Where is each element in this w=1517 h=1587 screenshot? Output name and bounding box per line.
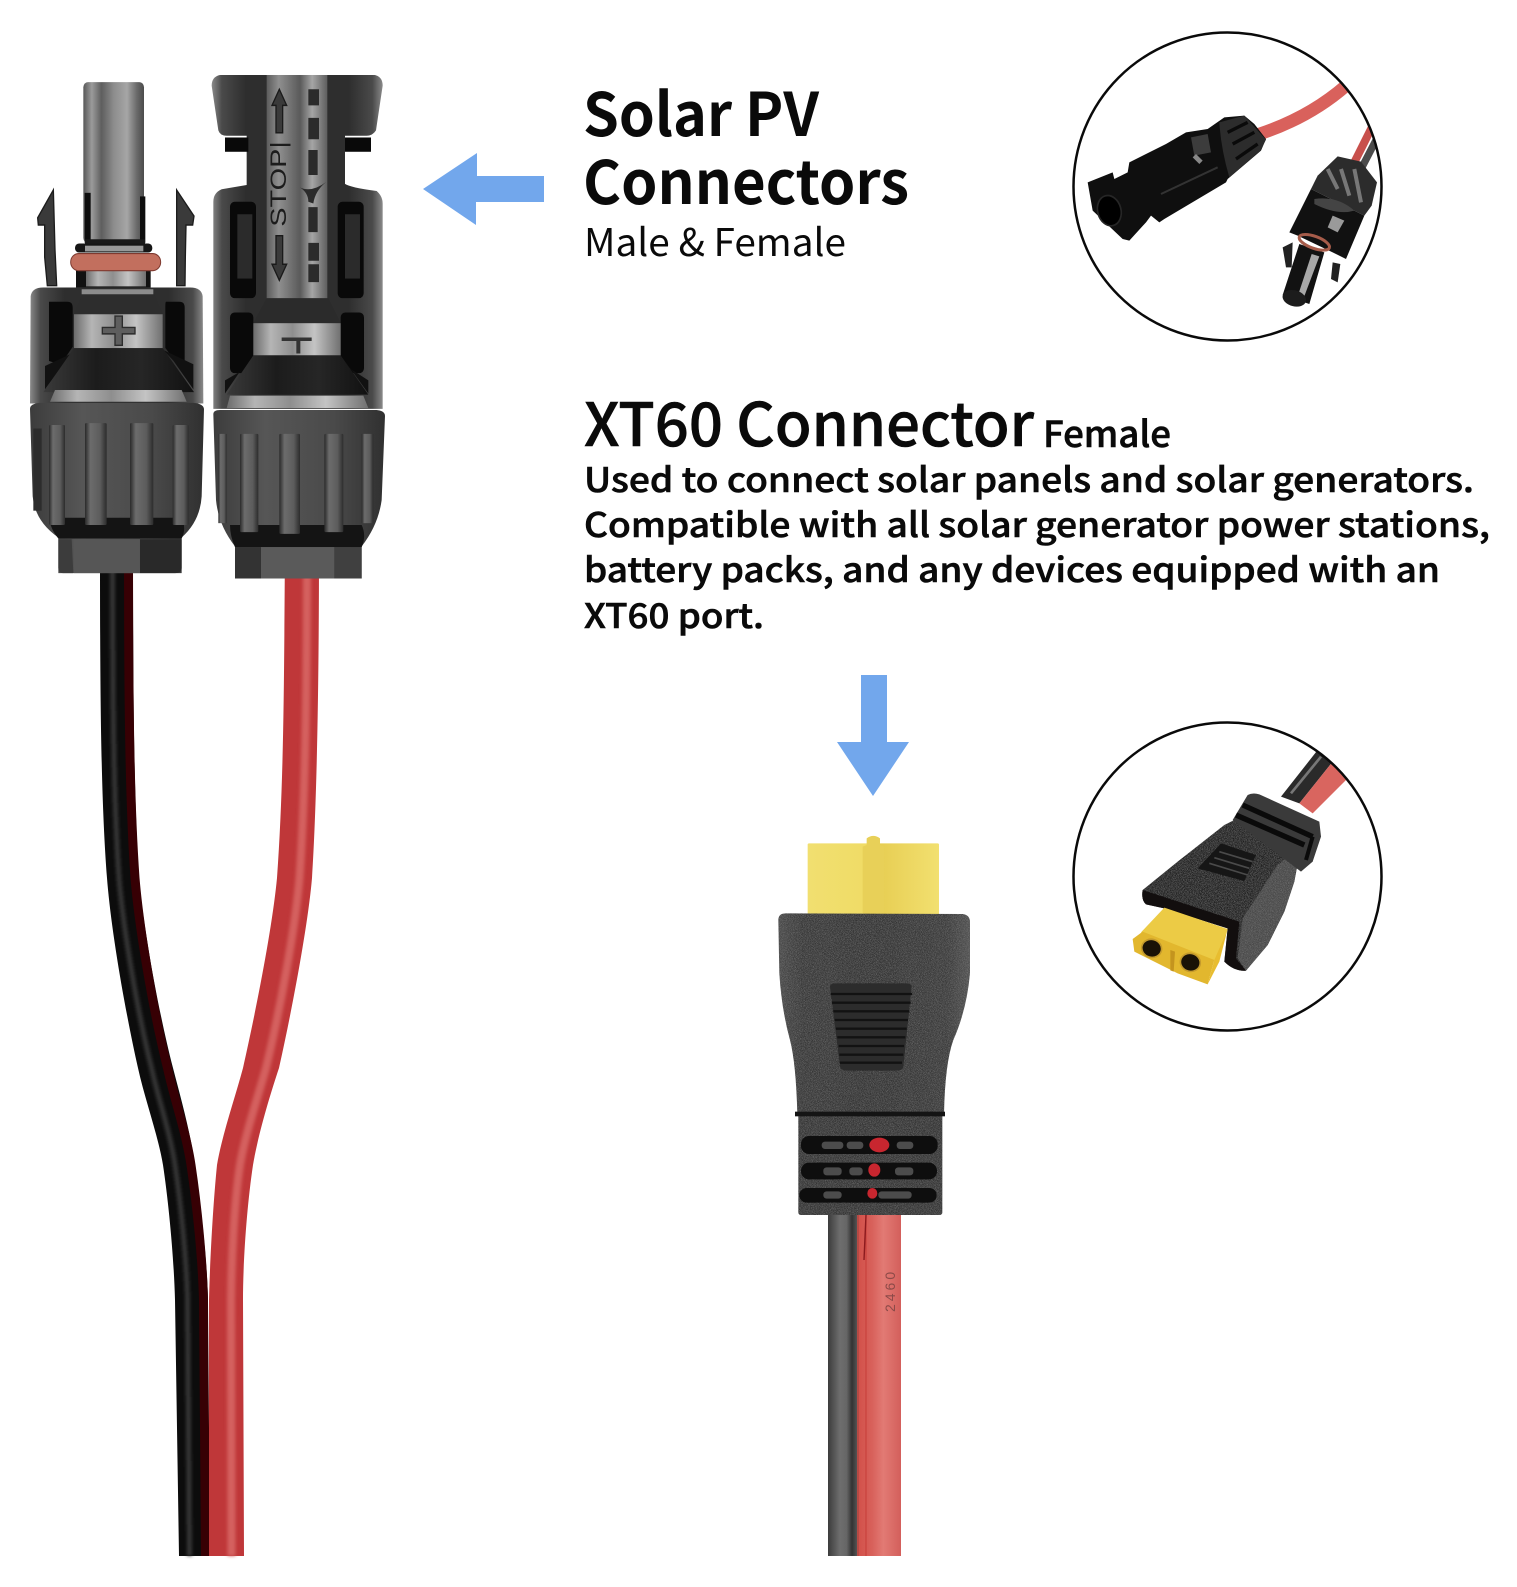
- central cone with minus sign: [227, 298, 368, 408]
- description text block: battery packs, and any devices equipped with an: [584, 543, 1440, 592]
- subheading: Male and Female: Male & Female: [584, 212, 846, 267]
- arrow: pointing down to XT60 connector: [837, 675, 909, 796]
- central metal column with STOP marking: [266, 75, 327, 304]
- description text block: Compatible with all solar generator power stations,: [584, 498, 1490, 547]
- central metal column with STOP marking: STOP|: [266, 141, 291, 227]
- housing: [212, 75, 383, 409]
- male connector: [1281, 156, 1377, 309]
- XT60 female connector: [778, 836, 970, 1556]
- yellow plug housing: [808, 836, 939, 915]
- cable below connector: [828, 1210, 901, 1556]
- heading: Solar PV Connectors: Connectors: [583, 135, 909, 222]
- yellow plug: [1133, 908, 1228, 984]
- molded body: [778, 913, 970, 1114]
- knurled nut: [213, 410, 385, 579]
- body opening shadow: [1142, 890, 1246, 971]
- ribbed grip: [830, 983, 912, 1071]
- heading: Solar PV Connectors: [583, 67, 909, 222]
- body side facet: [1238, 860, 1296, 970]
- cable below connector: 2460: [882, 1269, 898, 1312]
- heading: Solar PV Connectors: Solar PV: [583, 67, 820, 154]
- strain relief with slots: [795, 1112, 945, 1215]
- black wire with dark red edge: [100, 545, 208, 1556]
- strain relief ribs: [1233, 793, 1321, 872]
- wires: [1281, 750, 1348, 813]
- heading: XT60 Connector: XT60 Connector: [584, 377, 1034, 464]
- orange sealing ring: [71, 254, 161, 271]
- female solar PV connector: [212, 75, 385, 579]
- paired wires: [1351, 126, 1376, 168]
- description text block: [584, 453, 1490, 638]
- label: Female: Female: [1043, 406, 1171, 458]
- knurled nut: [30, 403, 204, 573]
- central cone with plus sign: [43, 287, 194, 402]
- red wire: [209, 545, 319, 1556]
- paired cable: black and red wires: [100, 545, 319, 1556]
- red wire: [1254, 86, 1346, 136]
- description text block: Used to connect solar panels and solar generators.: [584, 453, 1474, 502]
- metal pin: [75, 82, 152, 287]
- molded body: [1142, 820, 1301, 971]
- inset circle: XT60 connector photo: [1074, 722, 1382, 1030]
- arrow: pointing left to PV connectors: [423, 153, 544, 225]
- grip: [1198, 843, 1256, 881]
- windows: [225, 202, 368, 394]
- female connector: [1088, 116, 1266, 241]
- male solar PV connector: [30, 82, 204, 573]
- description text block: XT60 port.: [584, 589, 764, 638]
- inset circle: PV connectors photo: [1074, 32, 1383, 340]
- connector body: [30, 287, 203, 404]
- locking latches: [38, 190, 194, 286]
